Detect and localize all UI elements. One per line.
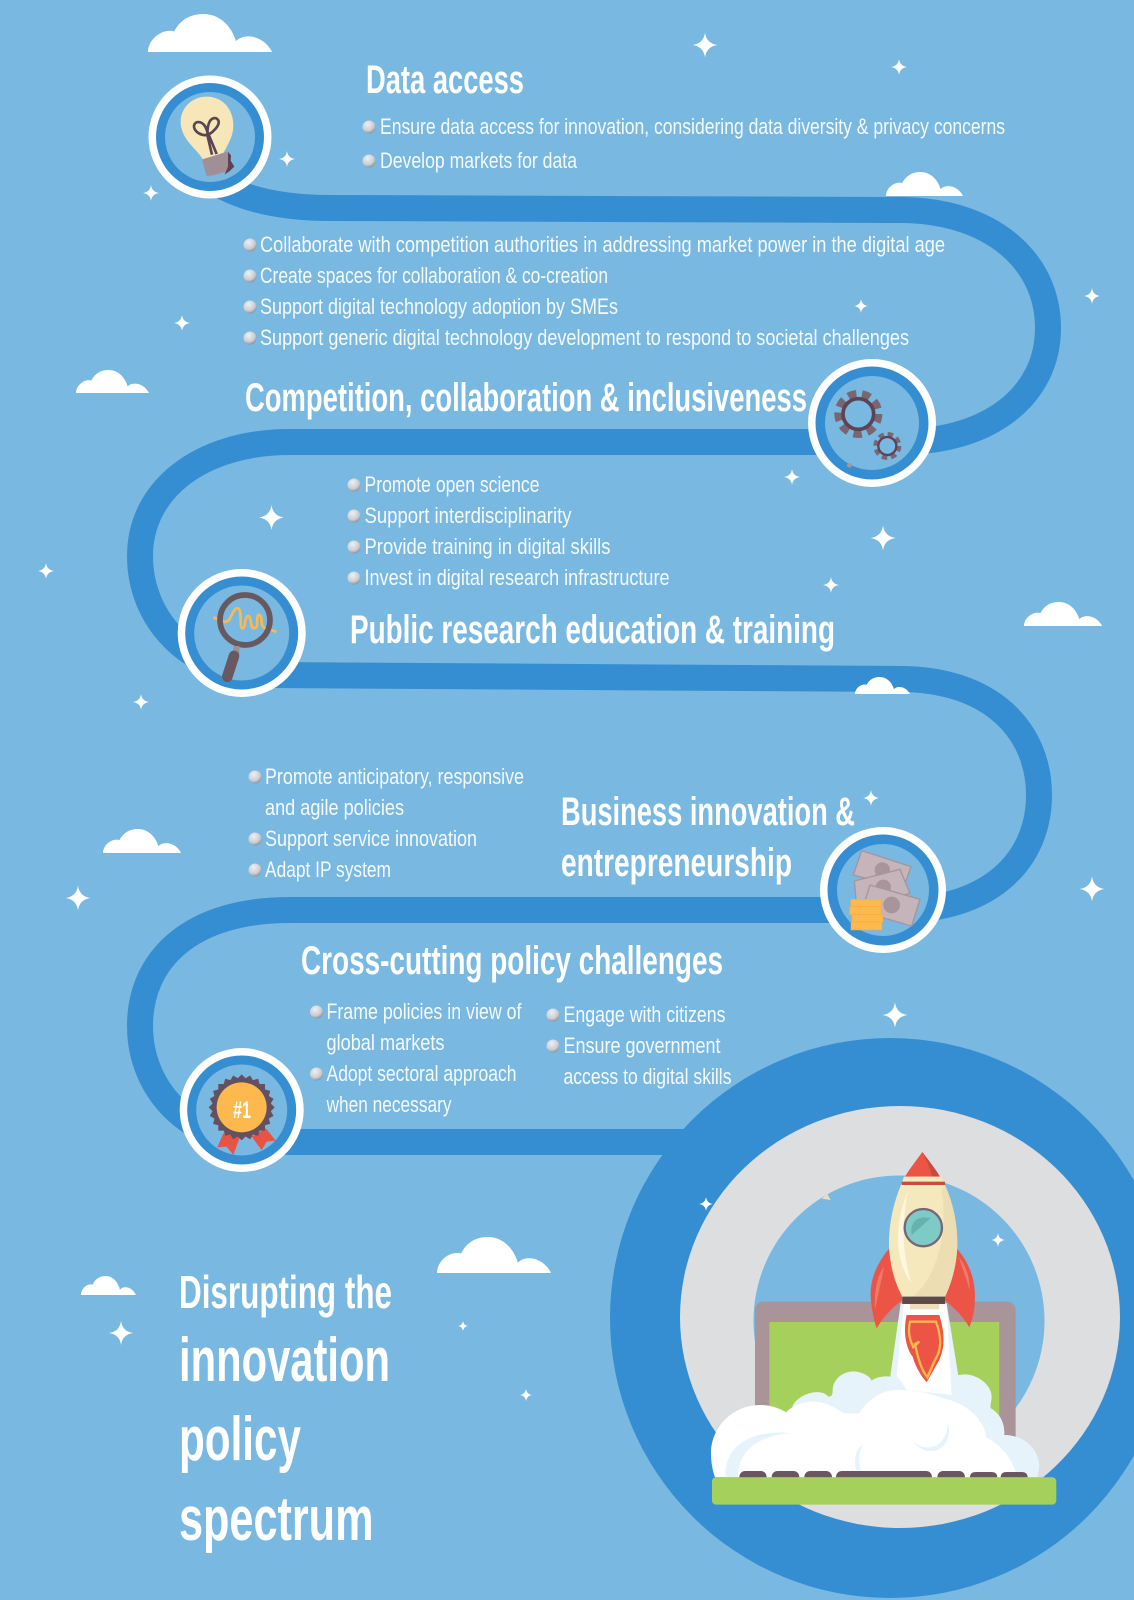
- bullet list: competition: Support generic digital technology development to respond to societal challenges: [260, 325, 909, 350]
- rocket fins: [871, 1248, 975, 1328]
- bullet list: cross-cutting left: when necessary: [326, 1092, 452, 1117]
- bullet list: business innovation: Promote anticipatory, responsive: [265, 764, 524, 789]
- smoke shading: [726, 1422, 949, 1477]
- nose stripe: [901, 1177, 945, 1185]
- body highlight: [898, 1190, 912, 1283]
- rocket nose: [905, 1152, 940, 1177]
- bullet list: public research: Provide training in digital skills: [364, 534, 610, 559]
- bullet list: competition: Create spaces for collaboration & co-creation: [260, 263, 608, 288]
- title: [179, 1266, 392, 1554]
- clouds: [76, 14, 1102, 1295]
- panel: public research education and training: [348, 472, 835, 652]
- bullet list: cross-cutting right: Engage with citizens: [564, 1002, 726, 1027]
- heading: business innovation: Business innovation &: [561, 790, 855, 834]
- rocket body: [889, 1185, 957, 1297]
- bullet list: business innovation: Support service innovation: [265, 826, 477, 851]
- icon: magnifying glass: [178, 569, 306, 697]
- bullet list: cross-cutting right: Ensure government: [564, 1033, 720, 1058]
- title: innovation: [179, 1326, 390, 1395]
- bullet list: cross-cutting left: Frame policies in view of: [326, 999, 522, 1024]
- bullet list: data access: Develop markets for data: [380, 148, 578, 173]
- inner sky circle: [754, 1176, 1044, 1466]
- winding road path: [140, 160, 1048, 1142]
- bullet list: public research: Support interdisciplinarity: [364, 503, 572, 528]
- bullet list: cross-cutting left: Adopt sectoral approach: [326, 1061, 516, 1086]
- icon: light bulb: [148, 76, 272, 198]
- inner sparkles: [699, 1197, 1005, 1247]
- bullet list: cross-cutting right: access to digital skills: [564, 1064, 732, 1089]
- bullet list: data access: [362, 114, 1005, 173]
- rocket launch illustration: [610, 1038, 1134, 1598]
- body shading: [913, 1185, 957, 1297]
- rocket window: [905, 1209, 942, 1246]
- icon: banknotes and coins: [820, 827, 946, 953]
- bullet list: public research: Promote open science: [364, 472, 540, 497]
- laptop base: [712, 1471, 1056, 1505]
- panel: competition, collaboration and inclusiveness: [244, 232, 945, 420]
- nose shade: [922, 1152, 940, 1177]
- bullet list: cross-cutting right: [546, 1002, 732, 1089]
- panel: data access: [362, 58, 1005, 173]
- badge label: #1: [233, 1097, 251, 1124]
- exhaust plume: [897, 1303, 952, 1395]
- bullet list: cross-cutting left: global markets: [326, 1030, 444, 1055]
- heading: competition: Competition, collaboration & inclusiveness: [245, 376, 807, 420]
- bullet list: competition: [244, 232, 945, 350]
- small cream speck: [822, 1194, 831, 1200]
- bullet list: competition: Support digital technology adoption by SMEs: [260, 294, 618, 319]
- bullet list: public research: [348, 472, 670, 590]
- laptop screen: [755, 1302, 1016, 1469]
- bullet list: competition: Collaborate with competition authorities in addressing market power in the digital age: [260, 232, 945, 257]
- window shade: [911, 1217, 931, 1235]
- title: Disrupting the: [179, 1266, 392, 1318]
- rocket engine band: [902, 1297, 945, 1309]
- panel: business innovation and entrepreneurship: [248, 764, 855, 885]
- heading: data access: Data access: [366, 58, 524, 102]
- bullet list: cross-cutting left: [310, 999, 522, 1117]
- heading: business innovation: entrepreneurship: [561, 841, 792, 885]
- title: spectrum: [179, 1485, 374, 1554]
- front smoke cloud: [711, 1390, 1017, 1477]
- panel: cross-cutting policy challenges: [301, 939, 732, 1117]
- flame: [905, 1315, 944, 1382]
- grey ring: [680, 1106, 1120, 1528]
- title: policy: [179, 1405, 301, 1474]
- heading: cross-cutting: Cross-cutting policy challenges: [301, 939, 723, 983]
- icon: gears: [808, 359, 936, 487]
- heading: public research: Public research education & training: [350, 608, 835, 652]
- rear smoke cloud: [792, 1371, 1039, 1477]
- bullet list: business innovation: Adapt IP system: [265, 857, 391, 882]
- rocket exhaust: [889, 1303, 961, 1390]
- bullet list: business innovation: [248, 764, 524, 882]
- bullet list: business innovation: and agile policies: [265, 795, 404, 820]
- heading: business innovation: [561, 790, 855, 885]
- bullet list: public research: Invest in digital research infrastructure: [364, 565, 670, 590]
- big blue circle: [610, 1038, 1134, 1598]
- icon: number one badge: [180, 1048, 304, 1172]
